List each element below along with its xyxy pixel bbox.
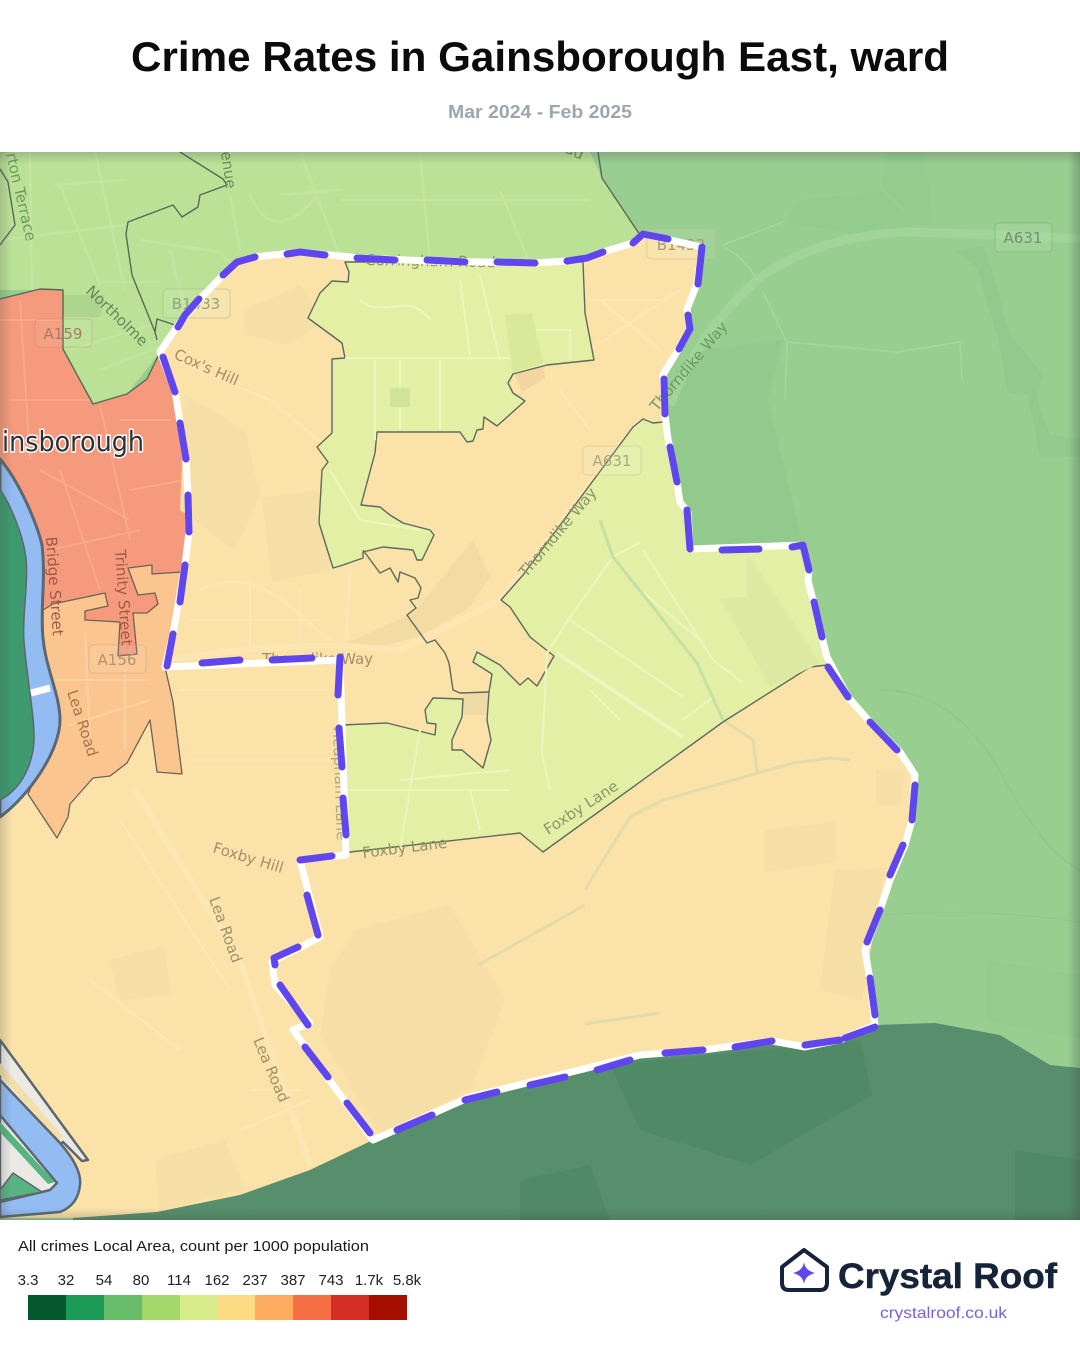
- street name labels: Heapham Lane: [329, 727, 351, 841]
- road shield and label A631 centre: A631: [593, 452, 631, 470]
- town label: Gainsborough: insborough: [2, 425, 144, 458]
- legend values: 32: [58, 1272, 74, 1289]
- east map detail: [723, 222, 1072, 922]
- title: Crime Rates in Gainsborough East, ward: [131, 33, 949, 80]
- street name labels: enue: [217, 150, 240, 190]
- street name labels: Corringham Road: [365, 251, 496, 271]
- north-west streets: [0, 152, 590, 370]
- legend values: 387: [280, 1272, 306, 1289]
- area: red-orange Gainsborough centre: [0, 289, 189, 680]
- legend values: 743: [318, 1272, 344, 1289]
- street name labels: rton Terrace: [2, 151, 40, 243]
- area: tan south-west: [0, 690, 200, 1218]
- road shield and label A156: [89, 645, 146, 673]
- legend values: 54: [96, 1272, 112, 1289]
- road shield and label A631 east: A631: [1004, 229, 1042, 247]
- logo wordmark: Crystal Roof: [838, 1257, 1057, 1296]
- area: yellow-green south-east block: [343, 419, 827, 855]
- river Trent upper: [0, 459, 60, 817]
- street name labels: Foxby Hill: [211, 839, 286, 877]
- logo: Crystal Roof: [782, 1250, 1057, 1322]
- red area streets: [0, 300, 185, 590]
- area: yellow-green north block: [308, 262, 594, 568]
- legend values: 80: [133, 1272, 149, 1289]
- drains across the tan area: [478, 720, 850, 1024]
- legend values: 162: [204, 1272, 230, 1289]
- street name labels: ad: [562, 139, 587, 164]
- area: tan shaded blocks: [180, 367, 872, 956]
- legend title: All crimes Local Area, count per 1000 population: [18, 1238, 369, 1255]
- area: dark green south woodland: [73, 1023, 1080, 1220]
- area: orange Lea Road with red cross enclave cut-out: [28, 565, 182, 838]
- road shield and label A631 centre: [583, 446, 641, 475]
- road shield and label B1433 north: B1433: [657, 236, 705, 254]
- tan area streets: [90, 290, 680, 1165]
- ward boundary dashed outline: [160, 234, 915, 1140]
- street name labels: Northolme: [82, 282, 152, 350]
- legend values: 114: [167, 1272, 191, 1289]
- bridge crossing: [31, 688, 50, 693]
- river lower with wharf: [0, 1040, 88, 1217]
- street name labels: Foxby Lane: [540, 777, 622, 838]
- legend values: 5.8k: [393, 1272, 422, 1289]
- map edge shading: [0, 152, 1080, 1220]
- street name labels: [2, 139, 732, 1105]
- street name labels: Lea Road: [63, 688, 102, 759]
- street name labels: Cox's Hill: [171, 345, 241, 390]
- legend values: 1.7k: [355, 1272, 384, 1289]
- website url: crystalroof.co.uk: [880, 1305, 1008, 1322]
- legend values: 237: [242, 1272, 268, 1289]
- area: medium green east: [0, 152, 1080, 1220]
- tan internal boundary line: [363, 550, 489, 693]
- street name labels: Trinity Street: [111, 548, 136, 646]
- road shield and label B1433 north: [647, 229, 715, 259]
- area: tan main ward: [160, 234, 915, 1190]
- road shield and label A631 east: [995, 223, 1052, 252]
- road shield and label B1433: [163, 289, 230, 318]
- icon: house with star: [782, 1250, 827, 1290]
- area: tan bottom edge: [74, 1141, 370, 1218]
- north block detail: [330, 275, 570, 530]
- small park patch: [63, 295, 105, 317]
- street name labels: Thorndike Way: [646, 318, 732, 415]
- orange area streets: [55, 630, 150, 750]
- road shield and label B1433: B1433: [172, 295, 220, 313]
- area: light green north-west: [0, 152, 640, 404]
- road shield and label A156: A156: [98, 651, 136, 669]
- road shield and label A159: A159: [44, 325, 82, 343]
- street name labels: Lea Road: [205, 894, 246, 965]
- boundary lines north-west: [0, 152, 640, 404]
- river bank green upper: [0, 491, 33, 799]
- legend: [18, 1238, 422, 1320]
- street name labels: Thorndike Way: [515, 484, 601, 581]
- road shield and label A159: [35, 319, 92, 347]
- street name labels: Thorndike Way: [261, 650, 373, 668]
- legend values: 3.3: [18, 1272, 38, 1289]
- legend values: [18, 1272, 422, 1289]
- legend colour scale: [28, 1295, 407, 1320]
- street name labels: Lea Road: [249, 1035, 293, 1105]
- subtitle: date range: Mar 2024 - Feb 2025: [448, 102, 632, 122]
- street name labels: Foxby Lane: [361, 834, 448, 862]
- street name labels: Bridge Street: [42, 536, 67, 636]
- woodland patches: [612, 1053, 1051, 1164]
- south-east block detail: [350, 520, 820, 850]
